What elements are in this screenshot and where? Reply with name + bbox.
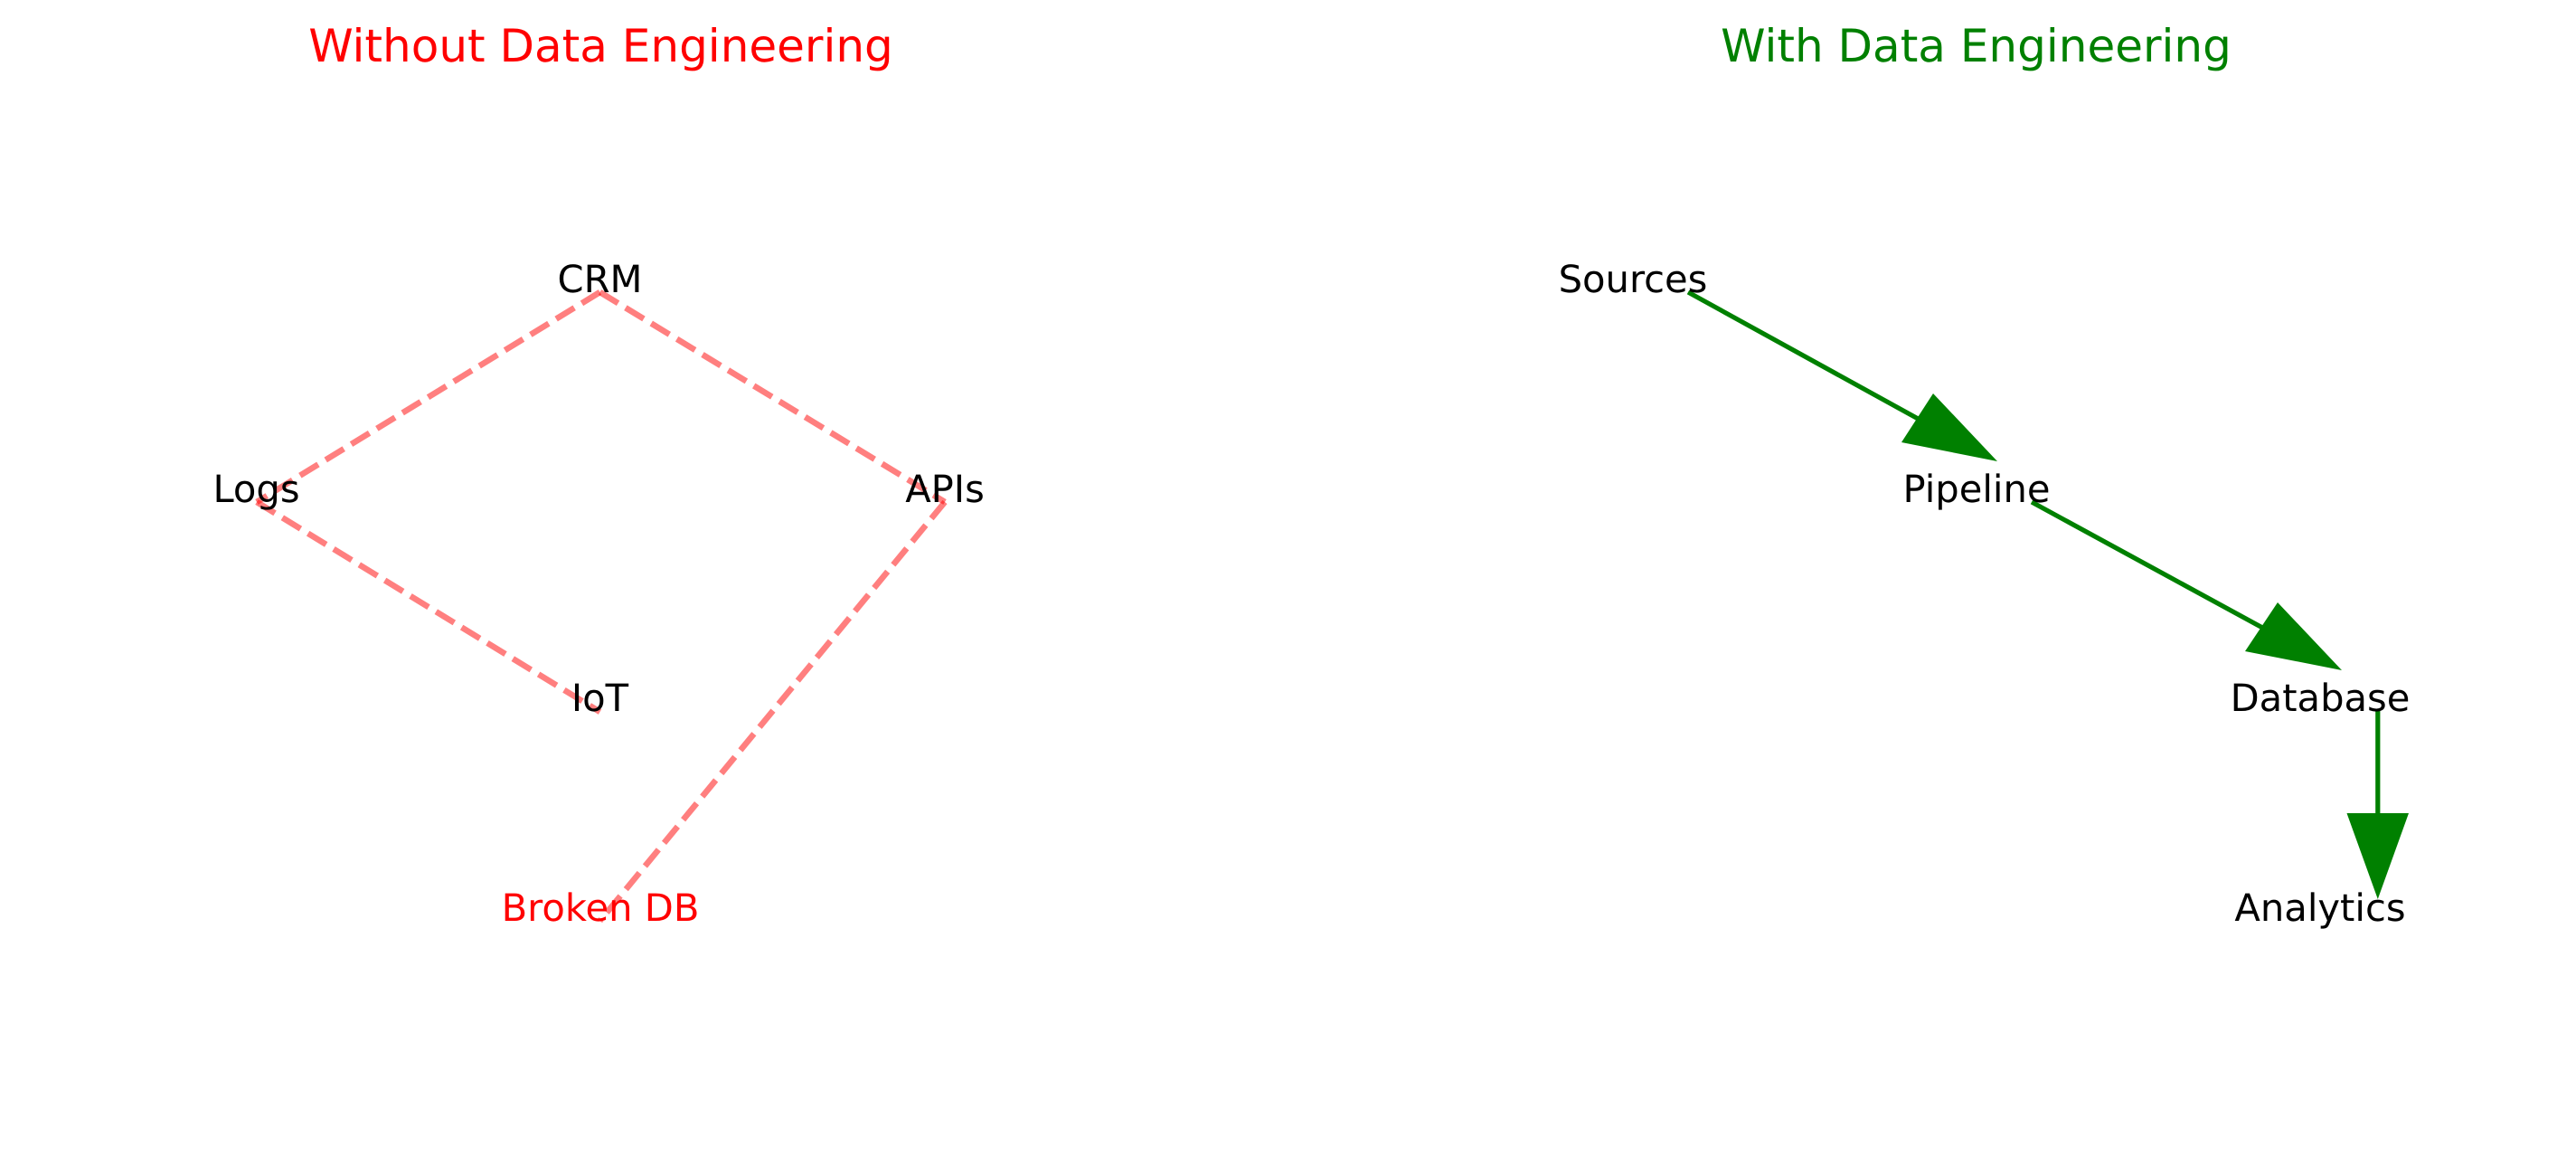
label: Pipeline: Pipeline [1902,467,2051,511]
arrow: Pipeline to Database [2032,502,2342,670]
label: Sources: Sources [1559,257,1707,301]
dashed link: APIs to Broken DB [600,502,945,921]
label: Analytics: Analytics [2234,886,2406,930]
panel: without data engineering [212,20,985,930]
arrow: Database to Analytics [2347,711,2409,899]
label: Database: Database [2231,676,2410,720]
arrow: Sources to Pipeline [1688,292,1997,461]
label: Broken DB: Broken DB [502,886,699,930]
dashed link: Logs to IoT [257,502,600,712]
dashed link: CRM to Logs [257,292,600,502]
left heading: Without Data Engineering [308,20,893,72]
dashed link: CRM to APIs [600,292,945,502]
label: Logs: Logs [212,467,300,511]
right heading: With Data Engineering [1721,20,2232,72]
label: IoT: IoT [571,676,629,720]
label: APIs: APIs [905,467,985,511]
label: CRM: CRM [558,257,642,301]
panel: with data engineering [1559,20,2410,930]
